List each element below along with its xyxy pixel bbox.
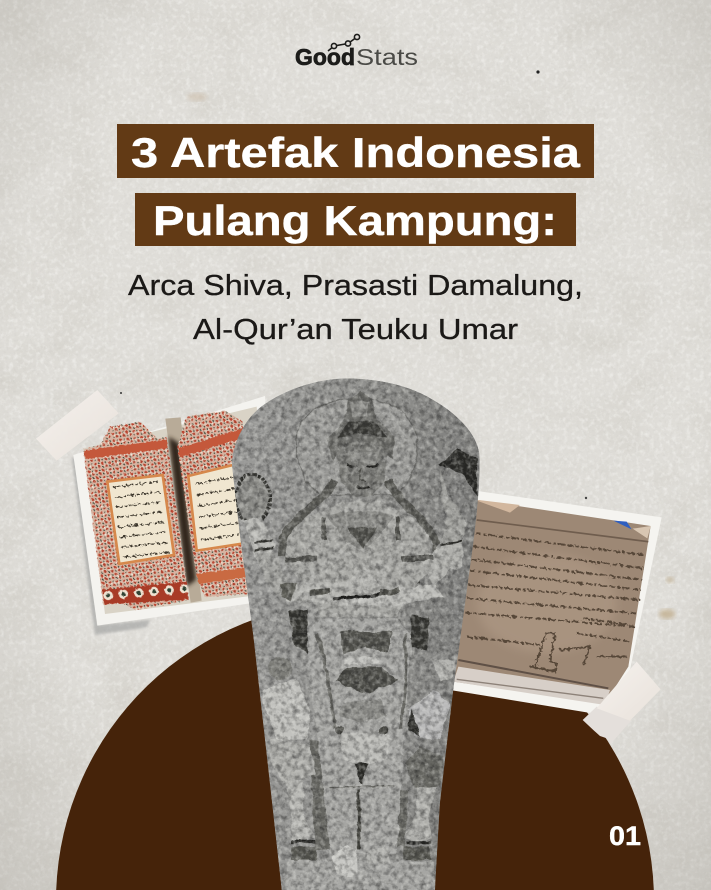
relief carving [234,391,477,890]
page number: 01 [609,821,641,851]
photo: Al-Qur'an Teuku Umar manuscript [36,390,273,635]
feet and pedestal [283,860,437,890]
dark relief shadows [288,547,429,653]
necklace [327,512,394,549]
raised arm with serpent [423,448,477,587]
title line 1: 3 Artefak Indonesia [131,129,581,176]
crossed forearms [280,567,380,603]
skirt [307,618,412,853]
tape strip [583,662,661,744]
subtitle [128,270,583,346]
subtitle: Al-Qur’an Teuku Umar [193,314,518,346]
brown circle backdrop [56,602,654,890]
left lotus [263,657,317,860]
torso [285,502,433,617]
photo frame [73,396,273,626]
halo [296,398,417,495]
face [337,446,387,497]
sash ornaments [340,632,392,655]
logo chart line [328,34,360,51]
stele base [232,378,480,890]
logo: GoodStats: Good [295,44,355,70]
right lotus [403,660,455,860]
tape strip [36,390,119,461]
title line 2: Pulang Kampung: [153,197,557,244]
photo shadow [72,457,150,635]
logo: GoodStats [295,34,418,70]
crown [327,391,395,462]
hair strands [278,478,440,557]
stone tablet image [453,499,651,705]
photo frame [450,490,662,714]
side panel shadows [310,740,408,850]
statue: Arca Shiva [232,378,480,890]
open book image [83,407,273,614]
subtitle: Arca Shiva, Prasasti Damalung, [128,270,583,302]
logo: GoodStats: Stats [356,44,418,70]
photo: Prasasti Damalung inscription [450,490,662,744]
raised arm with ring [234,475,288,597]
